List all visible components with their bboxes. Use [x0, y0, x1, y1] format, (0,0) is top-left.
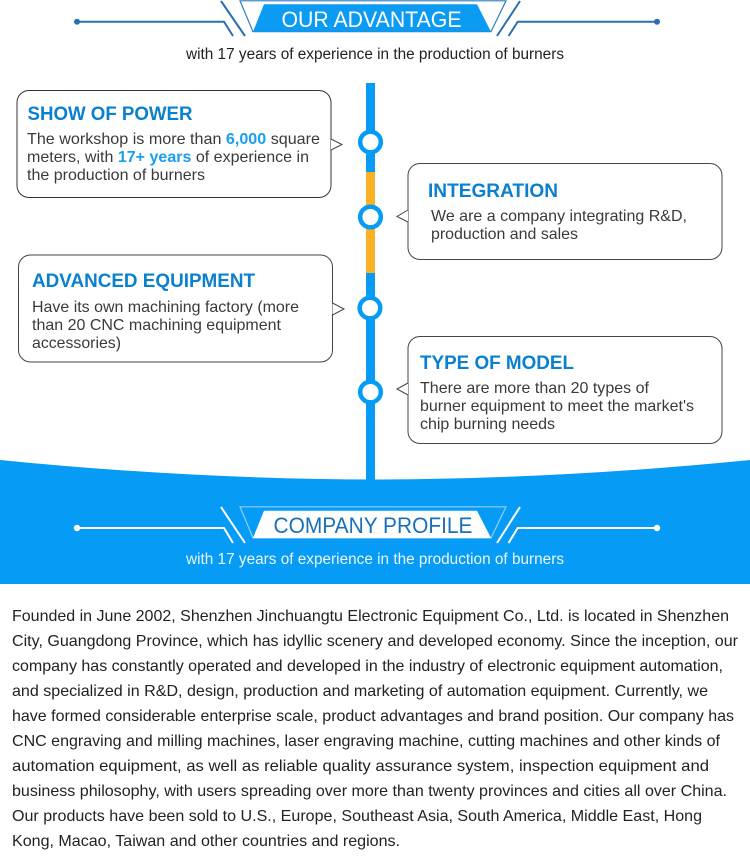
blue curved band	[0, 460, 750, 584]
company description text: Our products have been sold to U.S., Europe, Southeast Asia, South America, Middle East, Hong	[12, 808, 702, 825]
timeline	[360, 83, 381, 480]
company description text: CNC engraving and milling machines, laser engraving machine, cutting machines and other kinds of	[12, 733, 721, 750]
company description text: automation equipment, as well as reliable quality assurance system, inspection equipment and	[12, 758, 709, 775]
panel: show of power: meters, with 17+ years of experience in	[27, 149, 309, 166]
subtitle: with 17 years of experience in the production of burners	[185, 46, 564, 63]
title: our advantage: OUR ADVANTAGE	[282, 7, 462, 32]
panel: type of model	[397, 336, 722, 444]
company description text: Kong, Macao, Taiwan and other countries and regions.	[12, 833, 400, 850]
company description text: business philosophy, with users spreading over more than twenty provinces and cities all over China.	[12, 783, 727, 800]
panel: type of model: chip burning needs	[420, 416, 555, 433]
panel: advanced equipment: Have its own machining factory (more	[32, 299, 299, 316]
panel: integration	[397, 164, 722, 260]
company description text: have formed considerable enterprise scale, product advantages and brand position. Our company has	[12, 708, 734, 725]
panel: advanced equipment: ADVANCED EQUIPMENT	[32, 271, 255, 292]
header: company profile	[74, 507, 660, 543]
header: our advantage	[74, 1, 660, 36]
panel: show of power: SHOW OF POWER	[28, 104, 193, 125]
panel: show of power	[17, 90, 342, 198]
panel: advanced equipment	[18, 255, 344, 362]
company description text: Founded in June 2002, Shenzhen Jinchuangtu Electronic Equipment Co., Ltd. is located in Shenzhen	[12, 608, 729, 625]
subtitle on band: with 17 years of experience in the production of burners	[185, 551, 564, 568]
panel: type of model: There are more than 20 types of	[420, 380, 650, 397]
company description text: and specialized in R&D, design, production and marketing of automation equipment. Currently, we	[12, 683, 708, 700]
company description text: company has constantly operated and developed in the industry of electronic equipment automation,	[12, 658, 723, 675]
panel: show of power: The workshop is more than 6,000 square	[27, 131, 320, 148]
company description text	[12, 608, 739, 850]
panel: integration: INTEGRATION	[428, 181, 558, 202]
panel: type of model: burner equipment to meet the market's	[420, 398, 694, 415]
panel: integration: production and sales	[431, 226, 578, 243]
panel: advanced equipment: accessories)	[32, 335, 121, 352]
title: company profile: COMPANY PROFILE	[274, 513, 472, 538]
panel: integration: We are a company integrating R&D,	[431, 208, 687, 225]
company description text: City, Guangdong Province, which has idyllic scenery and developed economy. Since the inception, our	[12, 633, 739, 650]
panel: type of model: TYPE OF MODEL	[420, 353, 574, 374]
panel: show of power: the production of burners	[27, 167, 205, 184]
panel: advanced equipment: than 20 CNC machining equipment	[32, 317, 282, 334]
